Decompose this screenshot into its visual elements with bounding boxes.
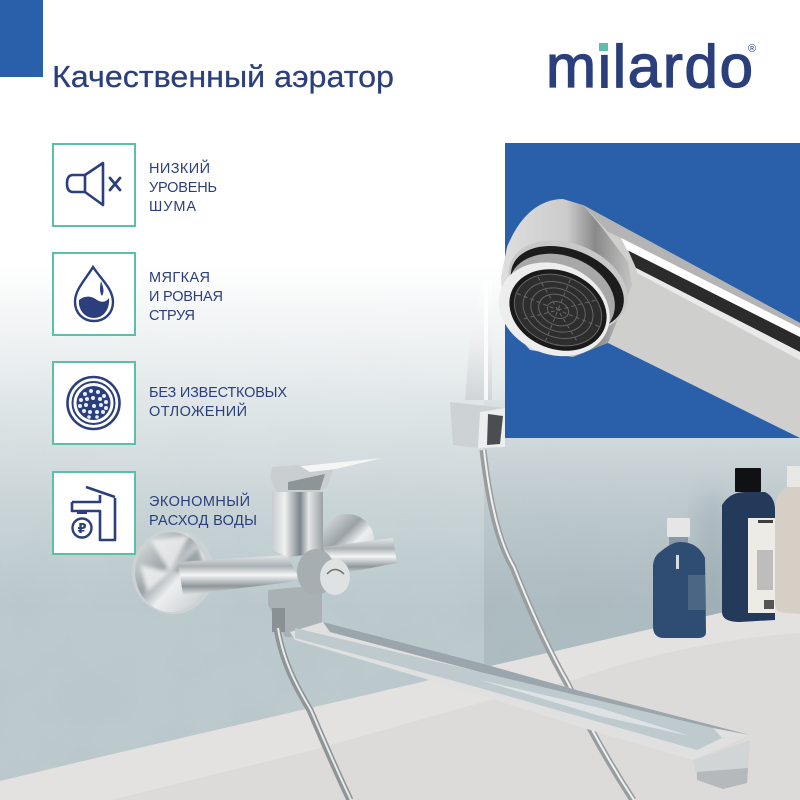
aerator head [501,199,632,357]
label: ОТЛОЖЕНИЙ [149,402,247,420]
bottle: dark blue with label [722,468,775,622]
horizontal body [178,555,300,595]
bottle: beige [775,466,800,614]
icon: aerator mesh [68,377,120,429]
icon box [53,472,135,554]
right handle [323,538,397,575]
left wall plate [132,530,214,614]
diverter outlet [272,608,285,632]
label: РАСХОД ВОДЫ [149,513,257,529]
temperature collar [297,549,335,595]
feature: low noise [53,144,217,226]
hand shower and holder [450,280,505,448]
bath spout [290,622,750,789]
icon: faucet with coin: ₽ [77,522,87,537]
title: Качественный аэратор [52,59,394,94]
bathtub [0,597,800,800]
label: И РОВНАЯ [149,289,223,305]
temperature knob [320,559,350,595]
feature: no limescale [53,362,287,444]
aerator ring [484,224,641,376]
label: МЯГКАЯ [149,270,210,286]
joint [268,585,322,637]
logo: milardo: milardo [546,33,753,100]
label: НИЗКИЙ [149,159,210,177]
label: СТРУЯ [149,308,195,324]
aerator mesh [497,255,619,365]
icon box [53,144,135,226]
panel: aerator close-up [484,143,800,438]
icon: muted speaker [67,163,120,205]
lever [270,458,383,493]
icon: water drop [75,267,113,321]
faucet hose [277,628,351,800]
bottle: small blue [653,518,706,638]
vertical body [272,492,323,557]
icon box [53,253,135,335]
feature: soft stream [53,253,223,335]
feature: economical water use [53,472,257,554]
label: УРОВЕНЬ [149,180,217,196]
logo: milardo: ® [748,43,756,55]
label: БЕЗ ИЗВЕСТКОВЫХ [149,385,287,401]
shower hose [483,450,634,800]
icon: faucet with coin [72,487,115,540]
icon box [53,362,135,444]
right wall plate [320,514,374,566]
corner blue square [0,0,43,77]
label: ЭКОНОМНЫЙ [149,492,250,510]
mixer faucet [178,458,397,637]
label: ШУМА [149,199,196,215]
spout arm [560,205,800,438]
